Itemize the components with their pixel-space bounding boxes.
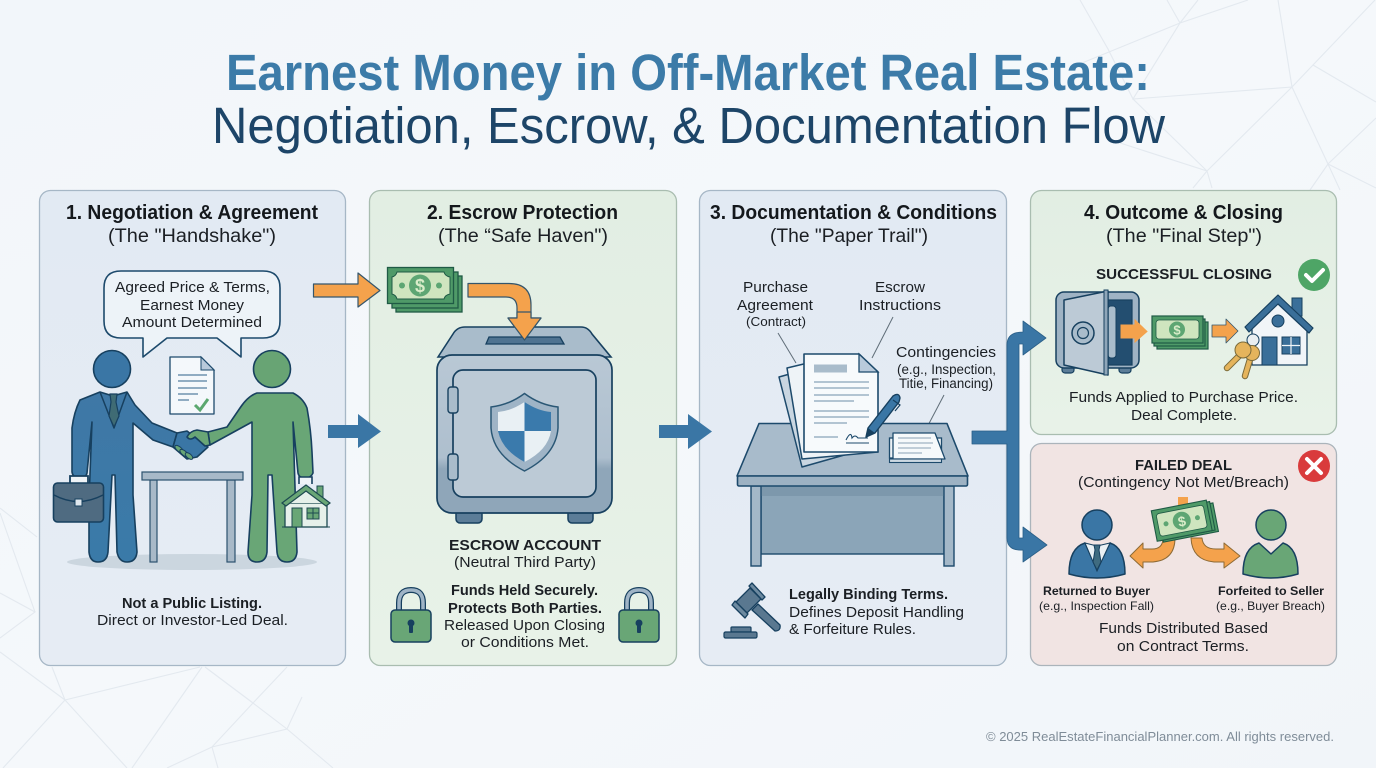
panel: documentation and conditions xyxy=(700,190,1006,666)
label: purchase agreement: (Contract) xyxy=(746,314,806,329)
footer: © 2025 RealEstateFinancialPlanner.com. All rights reserved. xyxy=(986,729,1334,744)
caption: funds held xyxy=(444,582,605,651)
panel: successful closing xyxy=(1030,190,1336,434)
caption: panel 3: Defines Deposit Handling xyxy=(789,604,964,621)
heading: failed deal xyxy=(1078,457,1289,491)
icon: cash stack: $ xyxy=(415,276,425,296)
heading: step 2 xyxy=(427,202,618,247)
caption: panel 4 xyxy=(1069,389,1298,424)
caption: escrow account: (Neutral Third Party) xyxy=(454,554,596,571)
speech bubble: Amount Determined xyxy=(122,314,262,331)
label: purchase agreement: Purchase xyxy=(743,279,808,296)
table xyxy=(142,472,243,562)
speech bubble: Earnest Money xyxy=(140,297,245,314)
icon: right padlock xyxy=(619,590,659,642)
caption: panel 1: Not a Public Listing. xyxy=(122,595,262,612)
arrow: cash into safe xyxy=(468,284,541,340)
icon: x badge xyxy=(1298,450,1330,482)
title: Earnest Money in Off-Market Real Estate: xyxy=(226,44,1150,101)
label: escrow instructions: Instructions xyxy=(859,297,941,314)
title: Negotiation, Escrow, & Documentation Flow xyxy=(212,97,1165,154)
label: purchase agreement xyxy=(737,279,814,363)
icon: seller bust xyxy=(1243,510,1298,578)
heading: step 4: 4. Outcome & Closing xyxy=(1084,202,1283,224)
label: contingencies: Titie, Financing) xyxy=(899,376,993,391)
icon: cash: $ xyxy=(1173,322,1181,338)
caption: panel 5: Funds Distributed Based xyxy=(1099,620,1268,637)
label: escrow instructions: Escrow xyxy=(875,279,925,296)
icon: handshake xyxy=(173,430,210,461)
panel: escrow protection xyxy=(370,190,676,666)
panel: negotiation and agreement xyxy=(40,190,346,666)
icon: open safe xyxy=(1056,290,1139,375)
icon: check badge xyxy=(1298,259,1330,291)
caption: funds held: Released Upon Closing xyxy=(444,617,605,634)
heading: step 1: (The "Handshake") xyxy=(108,226,276,247)
heading: step 2: (The “Safe Haven") xyxy=(438,226,608,247)
icon: buyer bust xyxy=(1069,510,1125,578)
icon: shield xyxy=(491,394,558,471)
heading: step 4 xyxy=(1084,202,1283,247)
icon: house xyxy=(282,477,330,527)
label: forfeited to seller: (e.g., Buyer Breach) xyxy=(1216,599,1325,613)
arrow: safe to cash xyxy=(1121,320,1147,342)
subheading: successful closing: SUCCESSFUL CLOSING xyxy=(1096,266,1272,283)
label: purchase agreement: Agreement xyxy=(737,297,814,314)
label: forfeited to seller: Forfeited to Seller xyxy=(1218,584,1324,598)
label: returned to buyer: (e.g., Inspection Fall) xyxy=(1039,599,1154,613)
icon: escrow safe xyxy=(437,312,612,523)
caption: escrow account xyxy=(449,537,601,571)
speech bubble xyxy=(104,271,280,357)
arrow: orange, agreement to cash xyxy=(314,273,380,307)
figure: seller xyxy=(208,350,313,562)
arrow: cash to house xyxy=(1212,319,1238,343)
arrow: funds to buyer xyxy=(1130,538,1175,568)
figure: buyer xyxy=(72,350,177,562)
panel: failed deal xyxy=(1030,444,1336,666)
caption: panel 5 xyxy=(1099,620,1268,655)
heading: step 1: 1. Negotiation & Agreement xyxy=(66,202,318,224)
arrow: blue, step 1 to step 2 xyxy=(328,414,381,448)
caption: panel 3: Legally Binding Terms. xyxy=(789,586,948,603)
icon: gavel xyxy=(724,583,780,638)
caption: funds held: or Conditions Met. xyxy=(461,634,589,651)
icon: cash xyxy=(1152,316,1208,349)
icon: briefcase xyxy=(54,476,104,522)
arrow: branch to outcomes xyxy=(972,321,1047,562)
heading: step 3 xyxy=(710,202,997,247)
caption: panel 1 xyxy=(97,595,288,629)
label: contingencies: Contingencies xyxy=(896,344,996,361)
label: escrow instructions xyxy=(859,279,941,358)
speech bubble: Agreed Price & Terms, xyxy=(115,279,270,296)
icon: split cash: $ xyxy=(1176,513,1187,530)
heading: step 3: (The "Paper Trail") xyxy=(770,226,928,247)
heading: failed deal: (Contingency Not Met/Breach) xyxy=(1078,474,1289,491)
heading: step 3: 3. Documentation & Conditions xyxy=(710,202,997,224)
icon: contract papers and pen xyxy=(779,354,900,467)
title xyxy=(212,44,1165,154)
caption: panel 1: Direct or Investor-Led Deal. xyxy=(97,612,288,629)
caption: panel 4: Deal Complete. xyxy=(1131,407,1237,424)
icon: desk xyxy=(737,424,968,566)
label: contingencies: (e.g., Inspection, xyxy=(897,362,996,377)
caption: funds held: Funds Held Securely. xyxy=(451,582,598,599)
heading: step 1 xyxy=(66,202,318,247)
label: contingencies xyxy=(896,344,996,433)
icon: contract document xyxy=(170,357,214,414)
heading: step 2: 2. Escrow Protection xyxy=(427,202,618,224)
arrow: funds to seller xyxy=(1191,538,1240,568)
caption: panel 3: & Forfeiture Rules. xyxy=(789,621,916,638)
heading: failed deal: FAILED DEAL xyxy=(1135,457,1232,474)
arrow: blue, step 2 to step 3 xyxy=(659,414,712,449)
heading: step 4: (The "Final Step") xyxy=(1106,226,1262,247)
label: returned to buyer: Returned to Buyer xyxy=(1043,584,1150,598)
caption: panel 3 xyxy=(789,586,964,638)
icon: house with keys xyxy=(1227,295,1313,376)
label: forfeited to seller xyxy=(1216,584,1325,613)
caption: panel 4: Funds Applied to Purchase Price. xyxy=(1069,389,1298,406)
caption: panel 5: on Contract Terms. xyxy=(1117,638,1249,655)
icon: left padlock xyxy=(391,590,431,642)
label: returned to buyer xyxy=(1039,584,1154,613)
caption: escrow account: ESCROW ACCOUNT xyxy=(449,537,601,554)
caption: funds held: Protects Both Parties. xyxy=(448,600,602,617)
icon: split cash xyxy=(1151,497,1218,543)
icon: cash stack xyxy=(388,268,462,312)
ground shadow xyxy=(67,554,317,570)
icon: contingency notes xyxy=(890,433,945,462)
